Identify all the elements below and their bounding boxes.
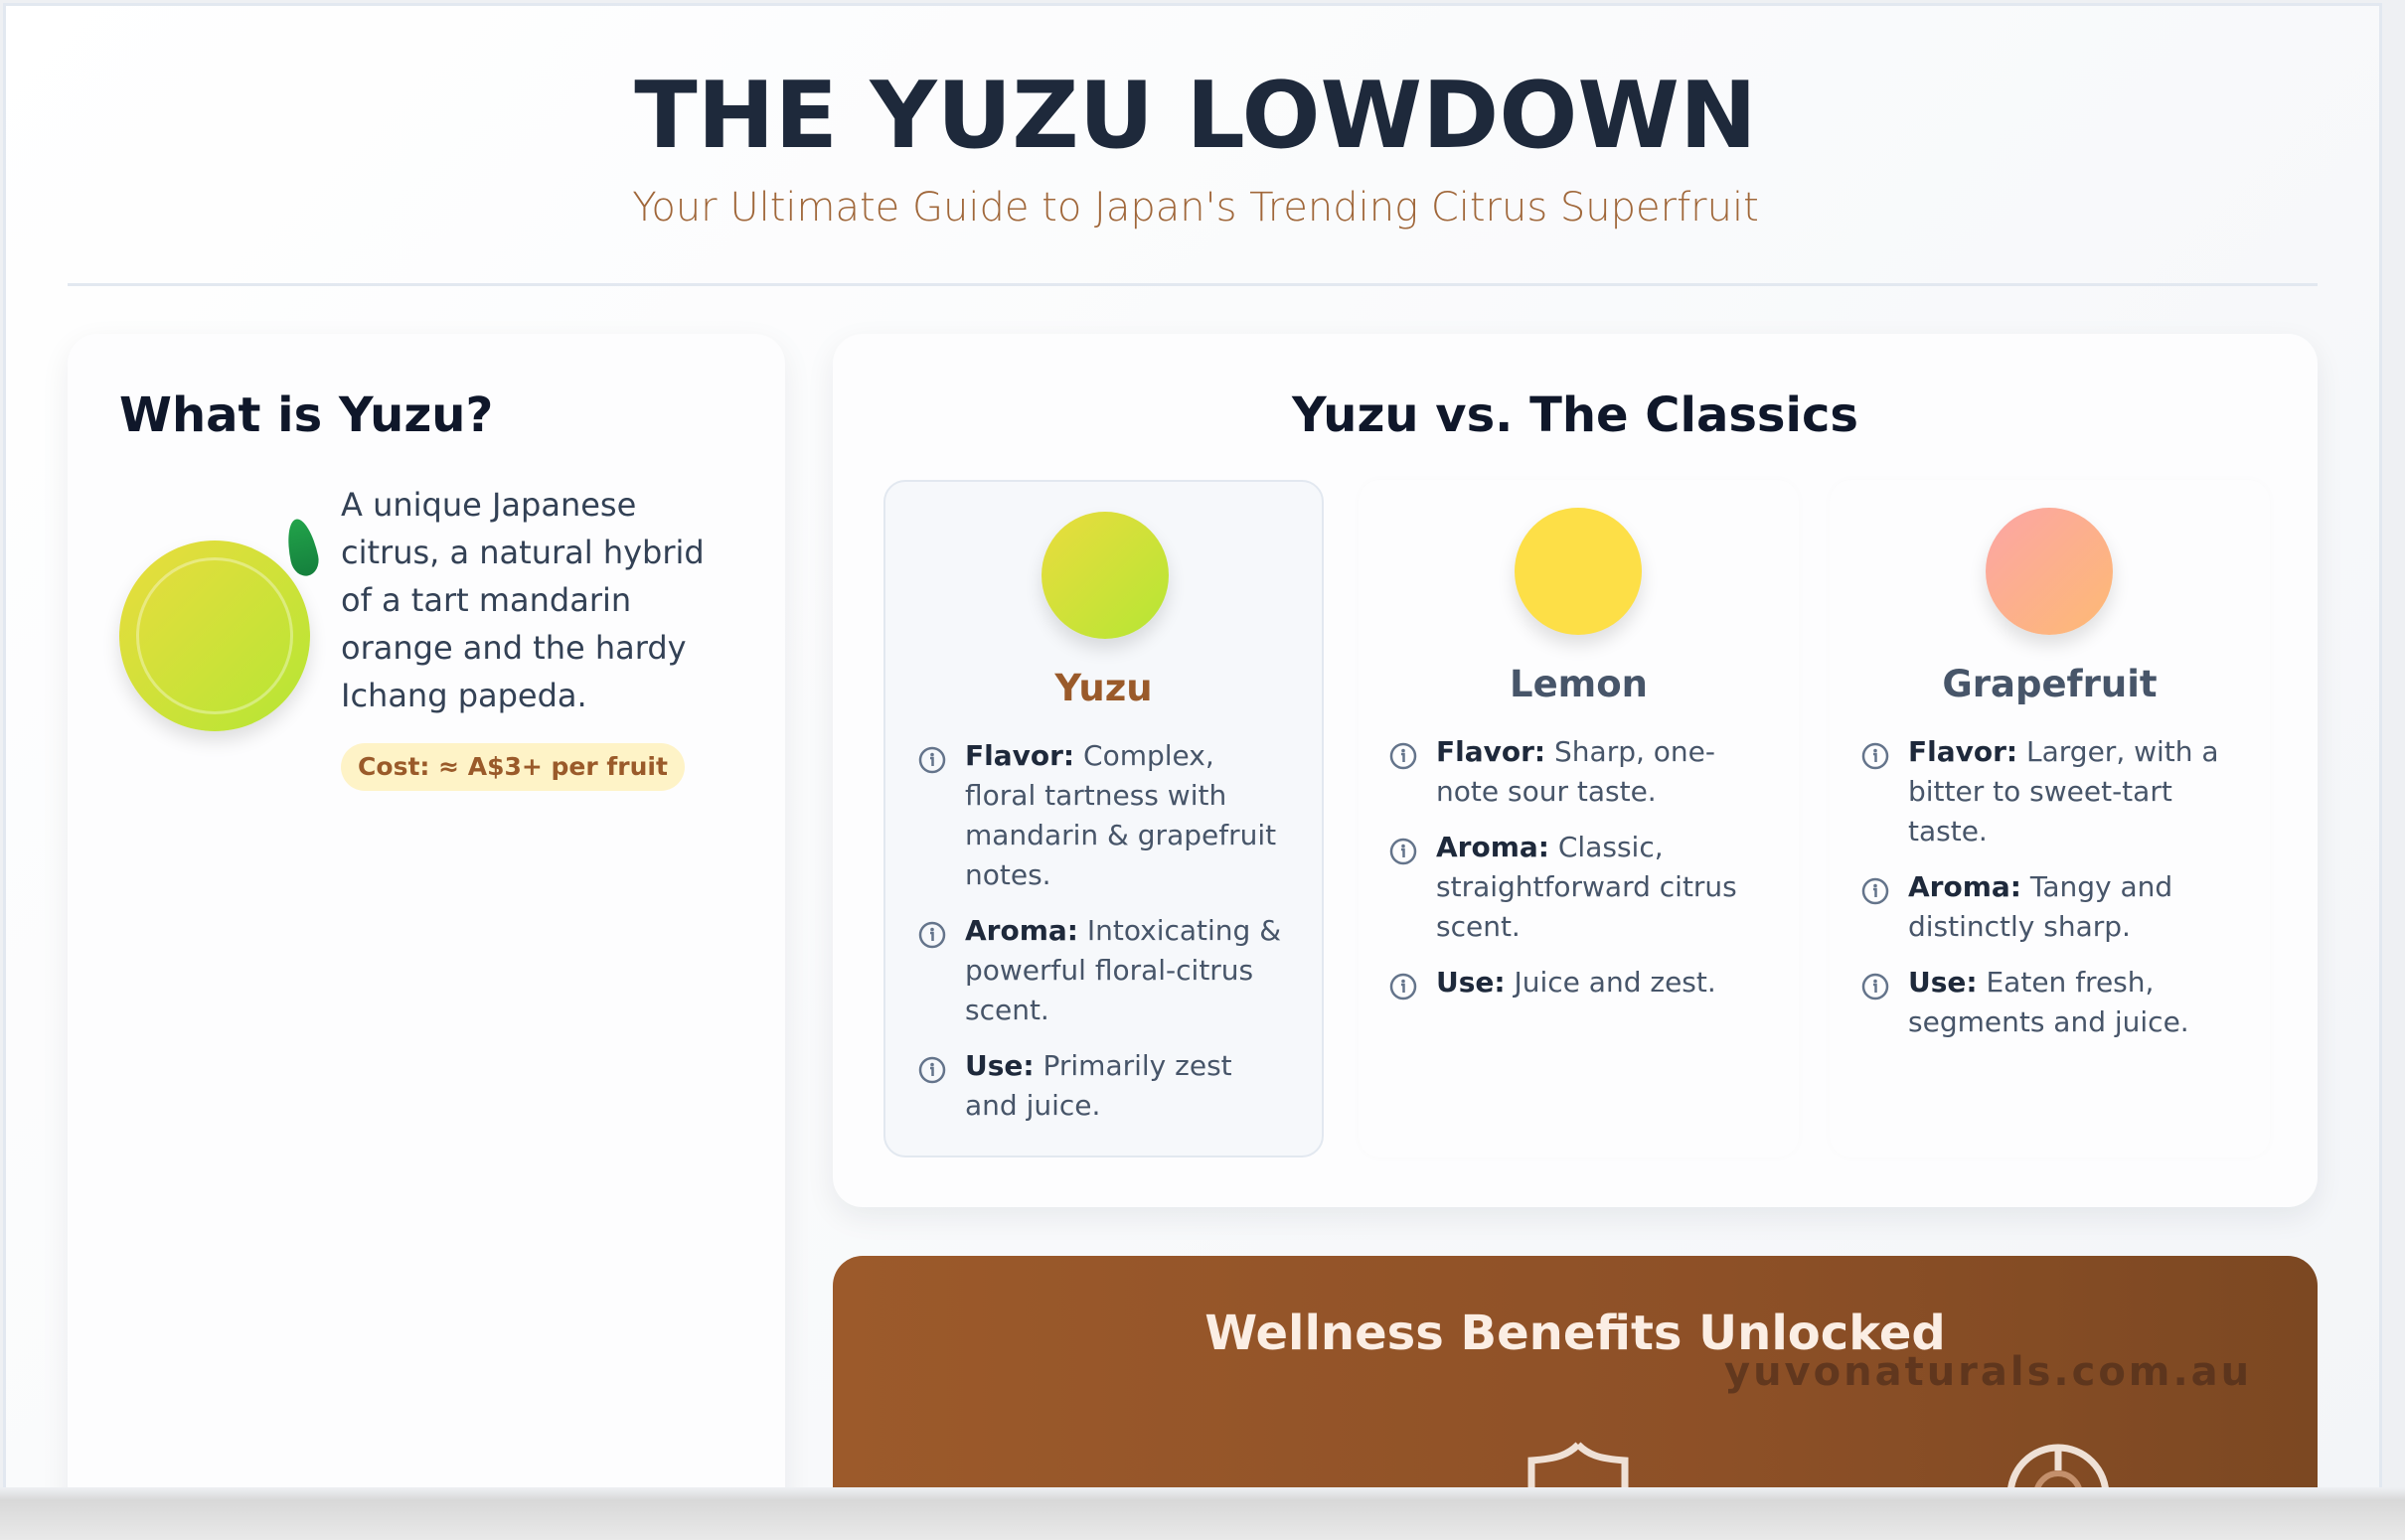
text: description: A unique Japanese citrus, a natural hybrid of a tart mandarin orange and the hardy Ichang papeda. — [341, 486, 705, 714]
icon: shield — [1528, 1443, 1628, 1487]
bullets: yuzu: Flavor: Complex, floral tartness with mandarin & grapefruit notes. — [965, 739, 1276, 891]
icon: power — [2007, 1445, 2109, 1487]
bullets: lemon: Flavor: Sharp, one-note sour taste. — [1436, 735, 1715, 808]
heading: wellness: Wellness Benefits Unlocked — [1204, 1306, 1946, 1361]
bullets: grapefruit: Flavor: Larger, with a bitter to sweet-tart taste. — [1908, 735, 2219, 847]
bullets: grapefruit — [1862, 735, 2219, 1038]
bullets: lemon — [1389, 735, 1737, 1000]
icon: yuzu fruit with leaf — [115, 519, 319, 745]
bullets: yuzu: Aroma: Intoxicating & powerful floral-citrus scent. — [965, 914, 1281, 1026]
icon: grapefruit — [1986, 508, 2113, 635]
bullets: lemon: Use: Juice and zest. — [1436, 966, 1716, 999]
panel: wellness benefits — [833, 1256, 2318, 1490]
title: THE YUZU LOWDOWN — [634, 62, 1757, 169]
label: grapefruit: Grapefruit — [1942, 663, 2158, 705]
panel: yuzu vs the classics — [833, 334, 2318, 1207]
bullets: yuzu: Use: Primarily zest and juice. — [965, 1049, 1232, 1122]
label: yuzu: Yuzu — [1054, 667, 1153, 709]
label: lemon: Lemon — [1510, 663, 1648, 705]
column: grapefruit — [1830, 480, 2270, 1157]
subtitle: Your Ultimate Guide to Japan's Trending Citrus Superfruit — [632, 185, 1759, 231]
bullets: grapefruit: Use: Eaten fresh, segments and juice. — [1908, 966, 2189, 1038]
column: lemon — [1359, 480, 1799, 1157]
callout: cost pill: Cost: ≈ A$3+ per fruit — [358, 752, 668, 781]
column: yuzu — [883, 480, 1324, 1157]
panel: what is yuzu — [68, 334, 785, 1526]
bullets: lemon: Aroma: Classic, straightforward citrus scent. — [1436, 831, 1737, 943]
icon: yuzu — [1042, 512, 1169, 639]
callout: cost pill — [341, 743, 685, 791]
heading: what is yuzu: What is Yuzu? — [119, 387, 493, 443]
watermark: yuvonaturals.com.au — [1724, 1349, 2252, 1395]
bullets: yuzu — [918, 739, 1281, 1122]
heading: comparison: Yuzu vs. The Classics — [1292, 387, 1858, 443]
icon: lemon — [1515, 508, 1642, 635]
bullets: grapefruit: Aroma: Tangy and distinctly sharp. — [1908, 870, 2172, 943]
